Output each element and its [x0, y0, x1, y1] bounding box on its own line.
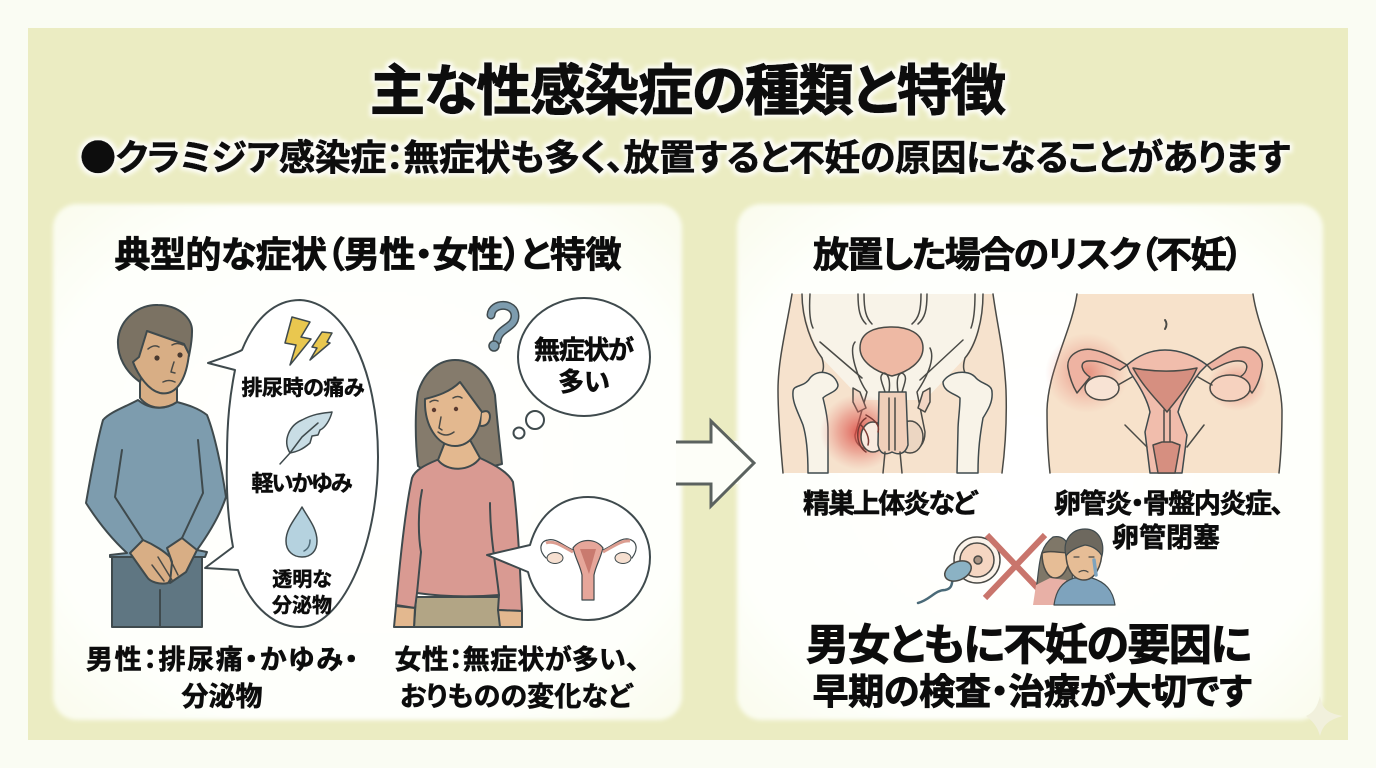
icon: lightning — [285, 317, 332, 365]
panel background — [737, 204, 1323, 720]
label: salpingitis — [1054, 489, 1284, 553]
label: itch: 軽いかゆみ — [252, 471, 353, 496]
label: salpingitis: 卵管炎・骨盤内炎症、 — [1054, 489, 1284, 519]
icon: infertility — [918, 529, 1115, 605]
caption: female: 女性：無症状が多い、 — [394, 644, 640, 675]
label: discharge: 透明な — [272, 568, 332, 591]
female anatomy illustration — [1045, 294, 1282, 473]
title: 主な性感染症の種類と特徴 — [370, 60, 1006, 122]
label: salpingitis: 卵管閉塞 — [1112, 523, 1220, 553]
left femur — [793, 372, 838, 473]
male anatomy illustration — [778, 294, 1006, 473]
panel: typical symptoms — [53, 204, 682, 720]
right femur — [943, 372, 992, 473]
icon: small uterus — [541, 539, 636, 600]
sperm — [918, 557, 974, 603]
conclusion text: 男女ともに不妊の要因に — [806, 622, 1252, 670]
arrow — [676, 421, 754, 506]
speech bubble: male symptoms — [205, 300, 378, 627]
woman figure — [394, 360, 522, 627]
caption: male: 分泌物 — [182, 682, 262, 712]
subtitle: ●クラミジア感染症：無症状も多く、放置すると不妊の原因になることがあります — [80, 129, 1290, 181]
icon: feather — [280, 412, 332, 464]
callout: uterus — [487, 497, 650, 620]
caption: female: おりものの変化など — [400, 682, 634, 712]
left tube — [1068, 349, 1127, 393]
caption: male — [86, 645, 358, 712]
speech bubble: male symptoms: 分泌物 — [272, 594, 332, 617]
heading: symptoms: 典型的な症状（男性・女性）と特徴 — [114, 234, 622, 275]
right tube — [1207, 347, 1262, 393]
thought bubble: asymptomatic: 多い — [558, 367, 610, 397]
thought bubble: asymptomatic — [514, 298, 650, 438]
caption: female — [394, 644, 640, 712]
panel: risk — [737, 204, 1323, 720]
conclusion text: 早期の検査・治療が大切です — [812, 671, 1252, 712]
thought bubble: asymptomatic: 無症状が — [534, 335, 634, 365]
caption: male: 男性：排尿痛・かゆみ・ — [86, 645, 358, 675]
icon: sparkle — [1306, 696, 1343, 736]
panel background — [53, 204, 682, 720]
couple — [1033, 529, 1115, 605]
label: epididymitis: 精巣上体炎など — [803, 489, 979, 519]
conclusion text — [806, 622, 1252, 712]
cross mark — [985, 535, 1047, 598]
egg — [954, 537, 1000, 583]
label: pain: 排尿時の痛み — [242, 377, 365, 400]
heading: risk: 放置した場合のリスク（不妊） — [813, 234, 1243, 275]
man figure — [86, 305, 226, 627]
icon: question mark — [489, 305, 515, 351]
icon: drop — [286, 507, 317, 557]
